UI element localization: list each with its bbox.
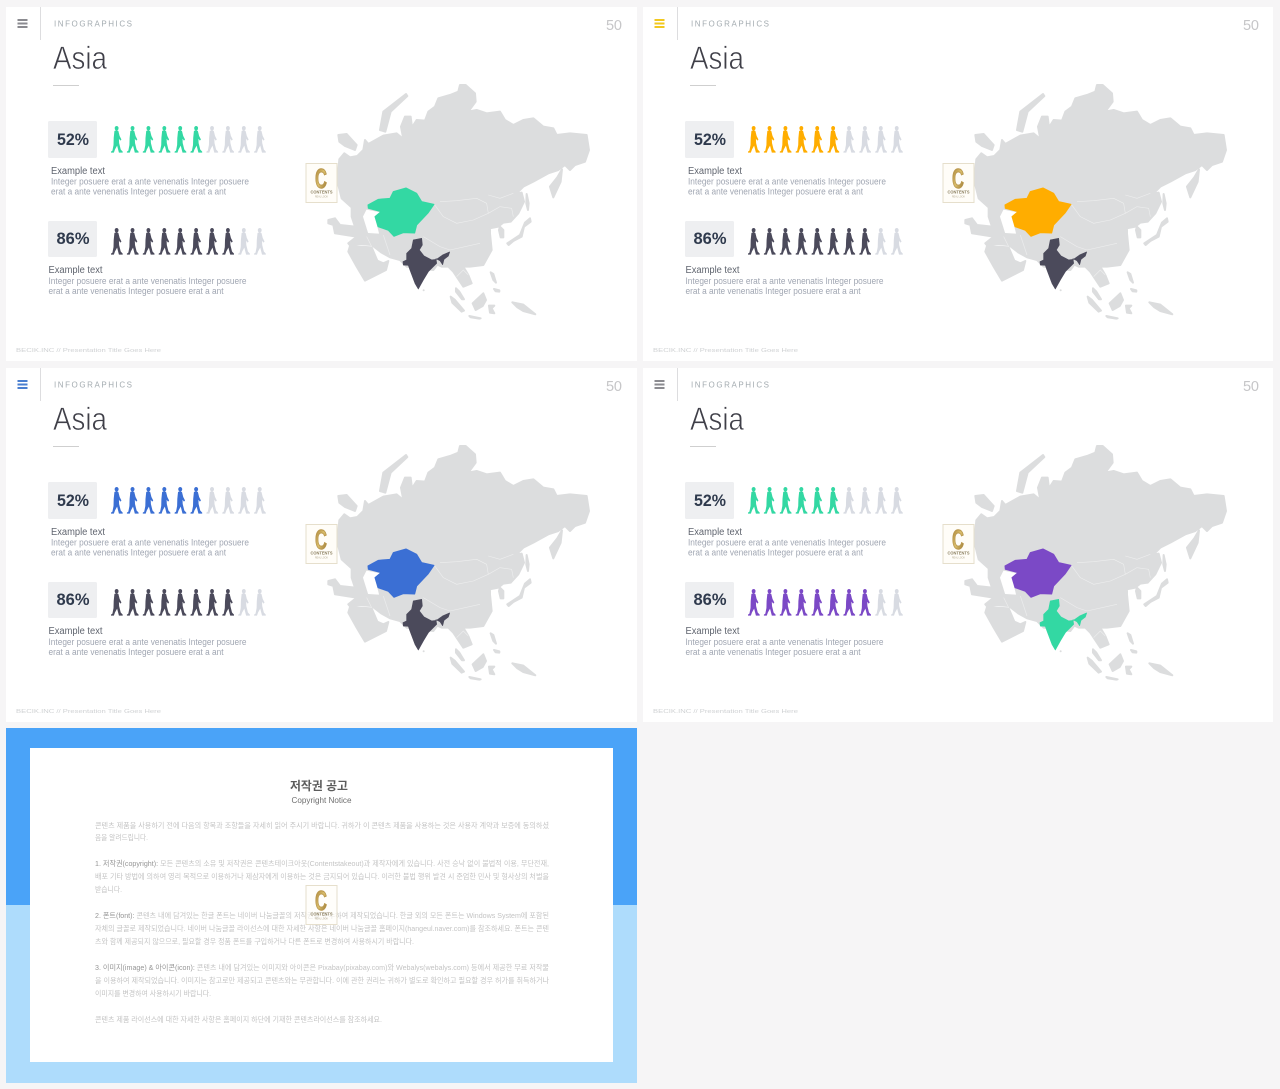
notice body: 1. 저작권(copyright): 모든 콘텐츠의 소유 및 저작권은 콘텐츠테이크아웃(Contentstakeout)과 제작자에게 있습니다. 사전 승낙 없이 불법적 이용, 무단전재, — [95, 858, 549, 868]
text block 2: erat a ante venenatis Integer posuere erat a ant — [48, 286, 224, 296]
watermark logo — [306, 163, 337, 202]
text block 2 — [48, 265, 247, 296]
text block 2: Integer posuere erat a ante venenatis Integer posuere — [48, 276, 247, 286]
stat: 52%: 52% — [57, 492, 89, 510]
stat: 52% — [685, 121, 734, 158]
pictogram: 86% — [111, 589, 266, 616]
watermark logo — [943, 524, 974, 564]
stat: 86% — [48, 582, 97, 618]
text block 1 — [51, 527, 249, 558]
text block 1: erat a ante venenatis Integer posuere erat a ant — [688, 548, 864, 558]
watermark logo: REAL LOOK — [952, 556, 965, 560]
stat: 86% — [685, 582, 734, 618]
footer: BECIK.INC // Presentation Title Goes Here — [653, 709, 798, 715]
stat: 86%: 86% — [56, 230, 90, 248]
text block 1: erat a ante venenatis Integer posuere erat a ant — [688, 186, 864, 196]
text block 2: Integer posuere erat a ante venenatis Integer posuere — [686, 276, 884, 286]
stat: 86%: 86% — [56, 591, 90, 609]
notice body: 음을 알려드립니다. — [95, 832, 148, 842]
text block 1: erat a ante venenatis Integer posuere erat a ant — [51, 186, 227, 196]
section label: INFOGRAPHICS — [691, 20, 769, 28]
watermark logo: C — [952, 163, 964, 194]
watermark logo: CONTENTS — [310, 190, 333, 194]
notice body: 콘텐츠 제품 라이선스에 대한 자세한 사항은 홈페이지 하단에 기재한 콘텐츠라이선스를 참조하세요. — [95, 1014, 382, 1024]
icon: menu — [654, 19, 664, 28]
footer: BECIK.INC // Presentation Title Goes Here — [653, 348, 798, 354]
pictogram: 86% — [748, 228, 903, 255]
footer: BECIK.INC // Presentation Title Goes Here — [16, 709, 161, 715]
text block 1: Integer posuere erat a ante venenatis Integer posuere — [51, 176, 249, 186]
map: Asia — [965, 85, 1226, 319]
text block 1: Example text — [51, 527, 105, 538]
text block 1: Integer posuere erat a ante venenatis Integer posuere — [51, 538, 249, 548]
section label: INFOGRAPHICS — [54, 20, 132, 28]
notice body: 3. 이미지(image) & 아이콘(icon): 콘텐츠 내에 담겨있는 이미지와 아이콘은 Pixabay(pixabay.com)와 Webalys(webalys.com) 등에서 제공한 무료 저작물 — [95, 962, 549, 972]
section label: INFOGRAPHICS — [54, 380, 132, 390]
watermark logo: CONTENTS — [310, 912, 333, 916]
text block 2 — [48, 626, 247, 657]
pictogram: 52% — [748, 126, 903, 153]
watermark logo — [306, 524, 337, 564]
pictogram: 52% — [111, 487, 266, 514]
stat: 52%: 52% — [694, 131, 726, 149]
pictogram: 52% — [748, 487, 903, 514]
stat: 52% — [685, 482, 734, 519]
text block 2: erat a ante venenatis Integer posuere erat a ant — [48, 647, 224, 657]
pictogram: 86% — [111, 228, 266, 255]
notice heading — [290, 778, 352, 805]
page number: 50 — [1243, 18, 1259, 34]
text block 2: Example text — [48, 626, 103, 637]
text block 2: Example text — [686, 265, 740, 276]
title: Asia — [690, 401, 744, 437]
pictogram: 86% — [748, 589, 903, 616]
text block 1 — [688, 166, 886, 196]
icon: menu — [654, 380, 664, 389]
watermark logo: REAL LOOK — [315, 916, 328, 920]
notice heading: Copyright Notice — [292, 795, 352, 805]
pictogram: 52% — [111, 126, 266, 153]
text block 1: Example text — [51, 166, 105, 177]
watermark logo: C — [315, 885, 327, 916]
panel: slide 2 — [643, 7, 1273, 361]
panel: slide 4 — [643, 368, 1273, 722]
notice body: 이미지를 변경하여 사용하시기 바랍니다. — [95, 988, 211, 998]
watermark logo — [943, 163, 974, 202]
notice body: 배포 기타 방법에 의하여 영리 목적으로 이용하거나 제삼자에게 이용하는 것은 금지되어 있습니다. 이러한 불법 행위 발견 시 준엄한 민사 및 형사상의 처벌을 — [95, 871, 549, 881]
notice body: 받습니다. — [95, 884, 122, 894]
stat: 52%: 52% — [694, 492, 726, 510]
stat: 86%: 86% — [694, 591, 727, 609]
notice body: 츠와 함께 제공되지 않으므로, 필요할 경우 정품 폰트를 구입하거나 다른 폰트로 변경하여 사용하시기 바랍니다. — [95, 936, 414, 946]
icon: menu — [18, 19, 28, 28]
text block 2: Example text — [48, 265, 103, 276]
watermark logo: REAL LOOK — [315, 556, 328, 560]
notice body: 자체의 글꼴로 제작되었습니다. 네이버 나눔글꼴 라이선스에 대한 자세한 사항은 네이버 나눔글꼴 홈페이지(hangeul.naver.com)를 참조하세요. 폰트는 콘텐 — [95, 923, 549, 933]
stat: 86% — [685, 221, 734, 257]
notice heading: 저작권 공고 — [290, 778, 348, 793]
watermark logo — [306, 885, 337, 924]
section label: INFOGRAPHICS — [691, 380, 769, 390]
text block 1: Integer posuere erat a ante venenatis Integer posuere — [688, 538, 886, 548]
map: Asia — [965, 446, 1226, 680]
title: Asia — [53, 40, 107, 76]
text block 1: Example text — [688, 166, 742, 177]
title: Asia — [690, 40, 744, 76]
page number: 50 — [606, 379, 622, 395]
title: Asia — [53, 401, 107, 437]
text block 2: Integer posuere erat a ante venenatis Integer posuere — [48, 637, 247, 647]
watermark logo: C — [315, 163, 327, 194]
icon: menu — [18, 380, 28, 389]
text block 1: Integer posuere erat a ante venenatis Integer posuere — [688, 176, 886, 186]
notice body — [95, 820, 549, 1024]
stat: 52% — [48, 482, 97, 519]
notice body: 을 이용하여 제작되었습니다. 이미지는 참고로만 제공되고 콘텐츠와는 무관합니다. 이에 관한 권리는 귀하가 별도로 확인하고 필요할 경우 허가를 취득하거나 — [95, 975, 549, 985]
panel: slide 3 — [6, 368, 637, 722]
panel: copyright notice — [6, 728, 637, 1083]
watermark logo: REAL LOOK — [315, 194, 328, 198]
text block 1 — [688, 527, 886, 558]
map: Asia — [328, 446, 589, 680]
text block 1: erat a ante venenatis Integer posuere erat a ant — [51, 548, 227, 558]
text block 2: erat a ante venenatis Integer posuere erat a ant — [686, 647, 861, 657]
page number: 50 — [606, 18, 622, 34]
stat: 86% — [48, 221, 97, 257]
watermark logo: CONTENTS — [948, 550, 970, 556]
notice body: 콘텐츠 제품을 사용하기 전에 다음의 항목과 조항들을 자세히 읽어 주시기 바랍니다. 귀하가 이 콘텐츠 제품을 사용하는 것은 사용자 계약과 보증에 동의하셨 — [95, 820, 549, 830]
footer: BECIK.INC // Presentation Title Goes Here — [16, 348, 161, 354]
watermark logo: REAL LOOK — [952, 194, 965, 198]
notice body: 2. 폰트(font): 콘텐츠 내에 담겨있는 한글 폰트는 네이버 나눔글꼴의 저작권을 준수하여 제작되었습니다. 한글 외의 모든 폰트는 Windows System에 포함된 — [95, 910, 549, 920]
text block 1 — [51, 166, 249, 196]
page number: 50 — [1243, 379, 1259, 395]
panel: slide 1 — [6, 7, 637, 361]
stat: 52%: 52% — [57, 131, 89, 149]
text block 2: erat a ante venenatis Integer posuere erat a ant — [686, 286, 861, 296]
stat: 52% — [48, 121, 97, 158]
text block 2 — [686, 265, 884, 296]
map: Asia — [328, 85, 589, 319]
text block 2: Example text — [686, 626, 740, 637]
watermark logo: C — [315, 524, 327, 555]
watermark logo: CONTENTS — [948, 190, 970, 194]
watermark logo: C — [952, 524, 964, 555]
stat: 86%: 86% — [694, 230, 727, 248]
text block 2 — [686, 626, 884, 657]
text block 1: Example text — [688, 527, 742, 538]
text block 2: Integer posuere erat a ante venenatis Integer posuere — [686, 637, 884, 647]
watermark logo: CONTENTS — [310, 550, 333, 556]
